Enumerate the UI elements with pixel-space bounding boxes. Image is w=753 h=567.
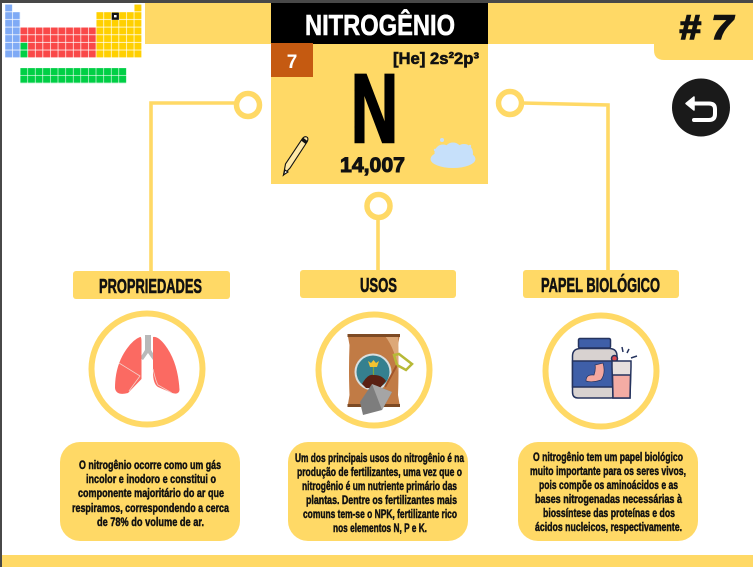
connector: propriedades — [151, 94, 260, 271]
icon: back button — [672, 78, 730, 136]
panel: papel biológico text — [518, 442, 698, 541]
atomic number: 7 — [287, 52, 297, 73]
panel: fertilizer icon — [318, 314, 430, 426]
panel: supplement icon — [546, 316, 656, 426]
heading: usos — [300, 270, 456, 298]
heading: papel biológico — [523, 270, 679, 298]
panel: usos text: nos elementos N, P e K. — [333, 523, 427, 535]
top yellow band — [145, 3, 753, 44]
connector: usos — [367, 194, 390, 270]
element symbol: N — [351, 54, 398, 163]
connector: papel biológico — [498, 92, 608, 270]
panel: propriedades text — [60, 442, 240, 541]
panel: propriedades text: incolor e inodoro e constitui o — [86, 474, 216, 486]
heading: propriedades — [73, 271, 230, 299]
panel: papel biológico text: ácidos nucleicos, respectivamente. — [535, 522, 682, 534]
panel: papel biológico text: bases nitrogenadas necessárias à — [535, 494, 682, 506]
icon: cloud — [430, 138, 476, 168]
panel: propriedades text: componente majoritário do ar que — [78, 488, 224, 500]
icon: pencil — [284, 137, 308, 175]
panel: usos text: comuns tem-se o NPK, fertilizante rico — [303, 509, 457, 521]
panel: usos text: Um dos principais usos do nitrogênio é na — [295, 453, 464, 465]
panel: lungs icon — [92, 314, 202, 424]
heading: propriedades: PROPRIEDADES — [99, 276, 202, 298]
panel: usos text — [288, 442, 468, 541]
element number tab: # 7 — [679, 9, 735, 47]
panel: propriedades text: O nitrogênio ocorre como um gás — [79, 460, 221, 472]
panel: propriedades text: respiramos, correspondendo a cerca — [72, 503, 229, 515]
element number tab — [654, 9, 753, 60]
title: NITROGÊNIO — [305, 8, 455, 42]
title — [271, 3, 488, 44]
electron configuration: [He] 2s²2p³ — [393, 49, 479, 68]
panel: papel biológico text: biossíntese das proteínas e dos — [543, 508, 675, 520]
bottom yellow band — [2, 555, 753, 567]
icon: fertilizer bag with shovel — [348, 334, 412, 415]
nitrogen cell marker — [112, 13, 119, 20]
atomic number — [271, 43, 313, 77]
panel: usos text: nitrogênio é um nutriente primário das — [302, 481, 457, 493]
heading: papel biológico: PAPEL BIOLÓGICO — [541, 273, 660, 297]
icon: supplement jar and shaker — [572, 338, 637, 398]
panel: usos text: produção de fertilizantes, uma vez que o — [297, 467, 462, 479]
icon: lungs — [115, 335, 180, 394]
panel: propriedades text: de 78% do volume de ar. — [97, 517, 204, 529]
element card — [271, 3, 488, 184]
panel: usos text: plantas. Dentre os fertilizantes mais — [306, 495, 457, 507]
atomic mass: 14,007 — [340, 153, 405, 177]
panel: papel biológico text: muito importante para os seres vivos, — [530, 466, 686, 478]
panel: papel biológico text: O nitrogênio tem um papel biológico — [533, 452, 683, 464]
periodic table locator — [5, 4, 142, 83]
heading: usos: USOS — [360, 275, 397, 297]
panel: papel biológico text: pois compõe os aminoácidos e as — [539, 480, 678, 492]
